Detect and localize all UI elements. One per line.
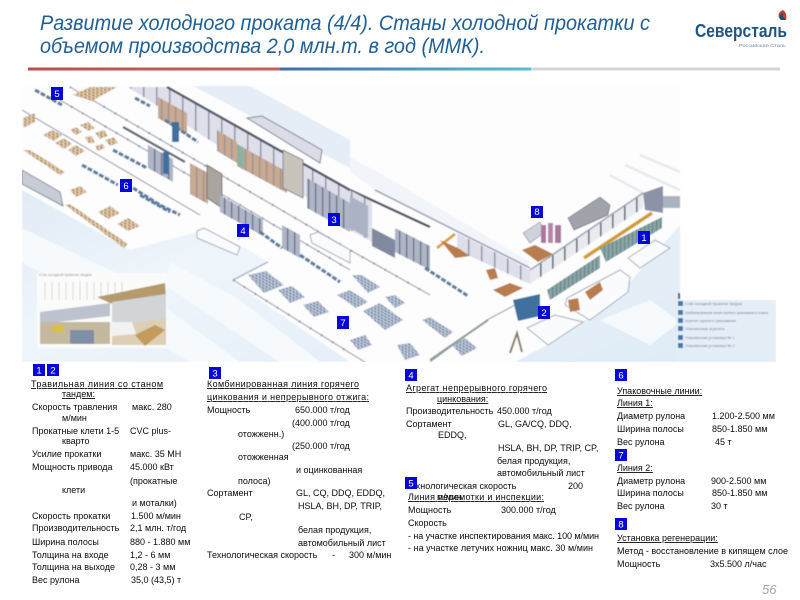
text block: pickling line and tandem mill: 1 — [36, 366, 42, 376]
ground background — [22, 86, 680, 362]
text block: combined galvanizing and annealing line: 3 — [212, 368, 218, 380]
text block: pickling line and tandem mill: 1.500 м/мин — [131, 511, 181, 521]
text block: combined galvanizing and annealing line — [207, 367, 391, 560]
left loading bay — [22, 170, 63, 206]
factory floor — [22, 86, 680, 362]
text block: regeneration unit: Метод - восстановление в кипящем слое — [617, 546, 788, 556]
text block: continuous galvanizing unit: Производительность — [406, 406, 494, 416]
text block: packing lines: 1.200-2.500 мм — [712, 411, 775, 421]
building: upper hall — [128, 87, 350, 222]
text block: pickling line and tandem mill: клети — [62, 485, 85, 495]
text block: pickling line and tandem mill: Вес рулона — [32, 575, 80, 585]
text block: regeneration unit: Установка регенерации: — [617, 533, 718, 543]
brown and tan equipment — [440, 240, 603, 312]
text block: combined galvanizing and annealing line: CP, — [239, 512, 253, 522]
text block: packing lines: Ширина полосы — [617, 424, 684, 434]
text block: pickling line and tandem mill: Травильная линия со станом — [31, 379, 163, 389]
text block: continuous galvanizing unit: цинкования: — [437, 394, 488, 404]
text block: pickling line and tandem mill: макс. 35 МН — [130, 449, 181, 459]
legend panel — [676, 293, 776, 362]
text block: pickling line and tandem mill: (прокатные — [130, 476, 177, 486]
text block: combined galvanizing and annealing line: (250.000 т/год — [292, 441, 351, 451]
text block: pickling line and tandem mill: 2 — [50, 366, 56, 376]
title: Развитие холодного проката (4/4). Станы холодной прокатки с — [40, 12, 650, 35]
text block: pickling line and tandem mill: 880 - 1.880 мм — [130, 537, 190, 547]
text block: combined galvanizing and annealing line: белая продукция, — [298, 525, 371, 535]
text block: regeneration unit: Мощность — [617, 559, 661, 569]
text block: pickling line and tandem mill: и моталки) — [132, 498, 177, 508]
text block: rewinding and inspection line: Линия перемотки и инспекции: — [408, 492, 544, 502]
text block: continuous galvanizing unit: EDDQ, — [438, 430, 467, 440]
text block: continuous galvanizing unit: Сортамент — [406, 419, 452, 429]
text block: regeneration unit: 8 — [618, 520, 624, 530]
text block: pickling line and tandem mill: 35,0 (43,5) т — [131, 575, 181, 585]
illustration marker 1: 1 — [641, 233, 647, 244]
text block: pickling line and tandem mill: тандем: — [62, 389, 95, 399]
illustration marker 8: 8 — [534, 207, 540, 218]
text block: packing lines: 45 т — [715, 437, 732, 447]
text block: continuous galvanizing unit: HSLA, BH, DP, TRIP, CP, — [498, 443, 598, 453]
text block: pickling line and tandem mill: CVC plus- — [130, 426, 171, 436]
text block: combined galvanizing and annealing line: (400.000 т/год — [292, 418, 351, 428]
wall: corner building — [457, 233, 530, 284]
title — [40, 12, 650, 58]
text block: rewinding and inspection line: - на участке летучих ножниц макс. 30 м/мин — [408, 543, 593, 553]
text block: packing lines — [615, 369, 775, 511]
text block: packing lines: 850-1.850 мм — [712, 488, 767, 498]
text block: combined galvanizing and annealing line: отожженн.) — [238, 429, 284, 439]
text block: pickling line and tandem mill — [31, 364, 190, 585]
factory illustration — [22, 86, 776, 362]
text block: rewinding and inspection line: Скорость — [408, 518, 447, 528]
white slabs — [197, 228, 670, 345]
text block: packing lines: Упаковочные линии: — [617, 386, 702, 396]
illustration marker 7 — [337, 316, 349, 329]
inset: hall cut-away: Стан холодной прокатки тандем — [39, 273, 92, 277]
text block: continuous galvanizing unit: Агрегат непрерывного горячего — [406, 383, 547, 393]
text block: pickling line and tandem mill: Толщина на выходе — [32, 562, 115, 572]
text block: pickling line and tandem mill: Прокатные клети 1-5 — [32, 426, 119, 436]
text block: continuous galvanizing unit: 4 — [408, 370, 414, 382]
text block: continuous galvanizing unit — [405, 369, 598, 502]
yellow crane line — [584, 213, 652, 258]
illustration marker 1 — [638, 231, 650, 244]
text block: combined galvanizing and annealing line: 300 м/мин — [349, 550, 391, 560]
legend panel: Упаковочная установка № 2 — [685, 344, 734, 348]
text block: rewinding and inspection line: 5 — [408, 478, 414, 490]
text block: pickling line and tandem mill: Усилие прокатки — [32, 449, 101, 459]
text block: regeneration unit — [615, 518, 788, 569]
text block: continuous galvanizing unit: 200 — [568, 481, 583, 491]
title: объемом производства 2,0 млн.т. в год (ММК). — [40, 35, 485, 58]
illustration marker 6 — [120, 179, 132, 192]
text block: packing lines: 30 т — [711, 501, 728, 511]
text block: continuous galvanizing unit: 450.000 т/год — [497, 406, 553, 416]
text block: packing lines: 900-2.500 мм — [711, 476, 766, 486]
text block: combined galvanizing and annealing line: - — [332, 550, 335, 560]
text block: packing lines: 6 — [618, 370, 624, 382]
text block: packing lines: Вес рулона — [617, 501, 665, 511]
text block: combined galvanizing and annealing line: цинкования и непрерывного отжига: — [207, 392, 369, 402]
text block: rewinding and inspection line: 300.000 т/год — [501, 505, 557, 515]
illustration marker 2: 2 — [541, 308, 547, 319]
text block: pickling line and tandem mill: Скорость прокатки — [32, 511, 110, 521]
rails — [22, 87, 515, 362]
text block: continuous galvanizing unit: белая продукция, — [497, 456, 570, 466]
text block: continuous galvanizing unit: Технологическая скорость — [406, 481, 517, 491]
text block: combined galvanizing and annealing line: Сортамент — [207, 488, 253, 498]
legend panel: Упаковочная установка № 1 — [685, 336, 734, 340]
text block: rewinding and inspection line — [405, 477, 599, 553]
illustration marker 5: 5 — [54, 89, 60, 100]
illustration marker 3 — [328, 213, 340, 226]
text block: rewinding and inspection line: Мощность — [408, 505, 452, 515]
text block: pickling line and tandem mill: Мощность привода — [32, 462, 112, 472]
text block: pickling line and tandem mill: Производительность — [32, 523, 120, 533]
text block: combined galvanizing and annealing line: Технологическая скорость — [207, 550, 318, 560]
illustration marker 7: 7 — [340, 318, 346, 329]
text block: pickling line and tandem mill: кварто — [62, 436, 89, 446]
legend panel: Комбинированная линия горячего цинкования и отжига — [685, 311, 769, 315]
text block: continuous galvanizing unit: автомобильный лист — [497, 468, 585, 478]
illustration marker 4: 4 — [240, 226, 246, 237]
illustration marker 6: 6 — [123, 181, 129, 192]
text block: pickling line and tandem mill: Толщина на входе — [32, 550, 108, 560]
text block: pickling line and tandem mill: м/мин — [62, 413, 87, 423]
illustration marker 3: 3 — [331, 215, 337, 226]
text block: packing lines: Ширина полосы — [617, 488, 684, 498]
text block: combined galvanizing and annealing line: автомобильный лист — [298, 538, 386, 548]
text block: combined galvanizing and annealing line: Мощность — [207, 405, 251, 415]
text block: pickling line and tandem mill: 2,1 млн. т/год — [130, 523, 187, 533]
text block: combined galvanizing and annealing line: полоса) — [238, 476, 271, 486]
legend panel: Упаковочные агрегаты — [685, 327, 725, 331]
logo: Severstal: Северсталь — [695, 21, 787, 41]
logo: Severstal: Российская Сталь — [739, 42, 787, 48]
mill stands — [148, 97, 430, 270]
teal pickling sections — [547, 217, 662, 300]
text block: regeneration unit: 3х5.500 л/час — [710, 559, 767, 569]
ground streaks — [22, 228, 680, 362]
text block: pickling line and tandem mill: Скорость травления — [32, 402, 117, 412]
text block: pickling line and tandem mill: 45.000 кВт — [130, 462, 174, 472]
text block: packing lines: Диаметр рулона — [617, 411, 685, 421]
illustration marker 2 — [538, 306, 550, 319]
illustration marker 4 — [237, 224, 249, 237]
text block: rewinding and inspection line: - на участке инспектирования макс. 100 м/мин — [408, 531, 599, 541]
text block: continuous galvanizing unit: GL, GA/CQ, DDQ, — [498, 419, 572, 429]
text block: combined galvanizing and annealing line: отожженная — [238, 452, 289, 462]
illustration marker 8 — [531, 206, 543, 218]
text block: pickling line and tandem mill: 1,2 - 6 мм — [130, 550, 170, 560]
text block: pickling line and tandem mill: макс. 280 — [132, 402, 172, 412]
text block: packing lines: 850-1.850 мм — [712, 424, 767, 434]
text block: combined galvanizing and annealing line: 650.000 т/год — [295, 405, 351, 415]
text block: packing lines: Диаметр рулона — [617, 476, 685, 486]
text block: packing lines: Вес рулона — [617, 437, 665, 447]
text block: packing lines: 7 — [618, 450, 624, 462]
sky streaks — [22, 86, 530, 268]
text block: pickling line and tandem mill: Ширина полосы — [32, 537, 99, 547]
inset: hall cut-away — [37, 273, 167, 348]
page number: 56 — [762, 582, 777, 597]
text block: packing lines: Линия 1: — [617, 398, 653, 408]
header rule — [28, 68, 780, 70]
text block: combined galvanizing and annealing line: GL, CQ, DDQ, EDDQ, — [296, 488, 385, 498]
legend panel: Агрегат горячего цинкования — [685, 319, 736, 323]
logo: Severstal — [695, 10, 787, 48]
steel coil fields — [248, 271, 477, 360]
blue process equipment — [35, 90, 468, 296]
tan coil fields — [23, 87, 140, 248]
text block: packing lines: Линия 2: — [617, 463, 653, 473]
text block: combined galvanizing and annealing line: HSLA, BH, DP, TRIP, — [298, 501, 382, 511]
text block: pickling line and tandem mill: 0,28 - 3 мм — [130, 562, 175, 572]
illustration marker 5 — [51, 87, 63, 100]
text block: combined galvanizing and annealing line: Комбинированная линия горячего — [207, 379, 359, 389]
text block: continuous galvanizing unit: м/мин — [437, 492, 462, 502]
legend panel: Стан холодной прокатки тандем — [685, 302, 742, 306]
regeneration plant — [523, 197, 610, 243]
cooling cranes — [510, 333, 522, 353]
text block: combined galvanizing and annealing line: и оцинкованная — [296, 465, 362, 475]
